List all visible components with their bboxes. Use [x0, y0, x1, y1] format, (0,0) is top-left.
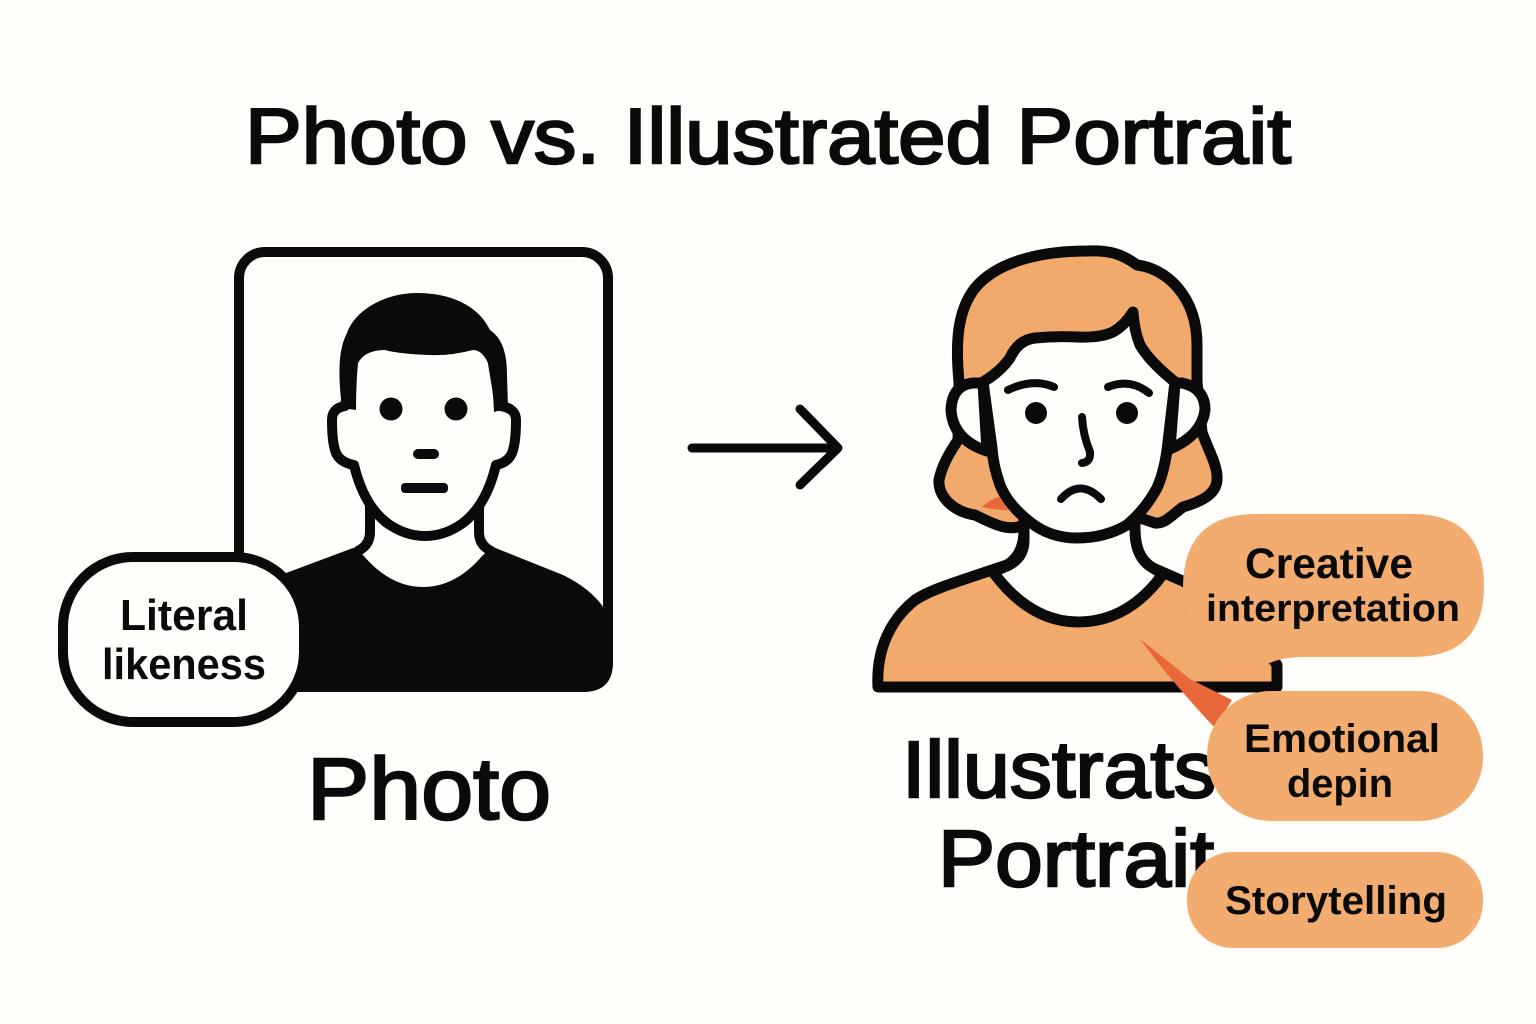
man's nose: [413, 449, 439, 459]
man's hair: [339, 293, 508, 412]
label: illustrated portrait: Illustrats: [902, 725, 1216, 814]
title: Photo vs. Illustrated Portrait: [245, 92, 1291, 180]
callout: literal likeness: [63, 557, 304, 722]
callout: emotional depth: depin: [1287, 762, 1393, 806]
photo frame: [239, 252, 608, 687]
callout: literal likeness: Literal: [120, 591, 248, 640]
callout: emotional depth: [1207, 691, 1483, 821]
orange accent strokes: [1140, 639, 1232, 728]
man's shirt: [262, 547, 613, 692]
woman's eyes: [1025, 402, 1138, 424]
woman's brows, nose and mouth: [1008, 383, 1149, 499]
label: illustrated portrait: [902, 725, 1216, 903]
callout: literal likeness: likeness: [102, 640, 266, 689]
man's eyes: [380, 398, 468, 420]
man's face: [332, 345, 516, 536]
man's mouth: [401, 483, 448, 493]
panel: illustrated portrait: [878, 251, 1277, 728]
woman's neck and collar: [993, 520, 1163, 622]
woman's body: [878, 530, 1277, 687]
woman's hair: [939, 251, 1217, 528]
callout: creative interpretation: [1183, 514, 1484, 663]
arrow: [692, 409, 838, 485]
label: illustrated portrait: Portrait: [938, 814, 1214, 903]
woman's ears: [951, 383, 1205, 451]
woman's face: [983, 312, 1175, 538]
callout: creative interpretation: Creative: [1245, 540, 1413, 588]
callout: creative interpretation: interpretation: [1206, 588, 1460, 630]
callout: emotional depth: Emotional: [1244, 717, 1440, 761]
label: photo: Photo: [307, 741, 551, 838]
callout: storytelling: Storytelling: [1225, 879, 1447, 923]
panel: photo portrait: [239, 252, 613, 692]
man's neck: [358, 505, 491, 551]
callout: storytelling: [1187, 852, 1483, 948]
